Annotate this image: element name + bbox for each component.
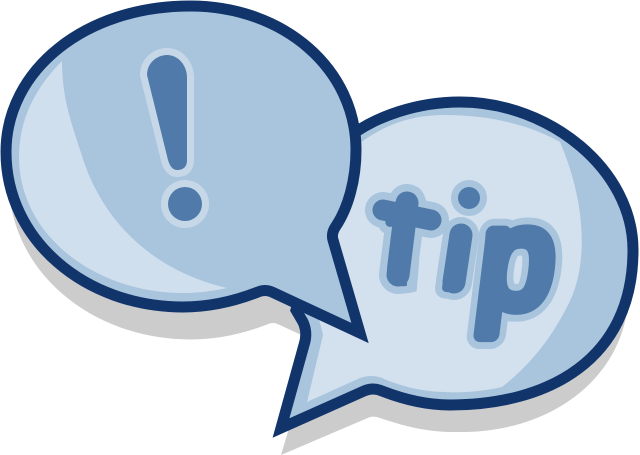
outline [281,102,633,428]
icon: exclamation mark [147,55,202,221]
text: tip: p [472,181,564,336]
panel: right speech bubble [281,102,633,428]
shadow: left bubble [14,33,368,360]
light crescent highlight [19,61,227,293]
text: tip: t [378,167,429,308]
bubble fill [6,6,360,333]
text: tip: t [378,167,429,308]
shadow: right bubble [281,250,628,455]
text: tip: i [436,186,481,311]
light inner area [307,115,582,402]
text: tip: p [472,181,564,336]
bubble fill [281,102,633,428]
text: tip: i [436,186,481,311]
panel: left speech bubble [6,6,360,333]
text: tip [378,167,564,336]
outline [6,6,360,333]
